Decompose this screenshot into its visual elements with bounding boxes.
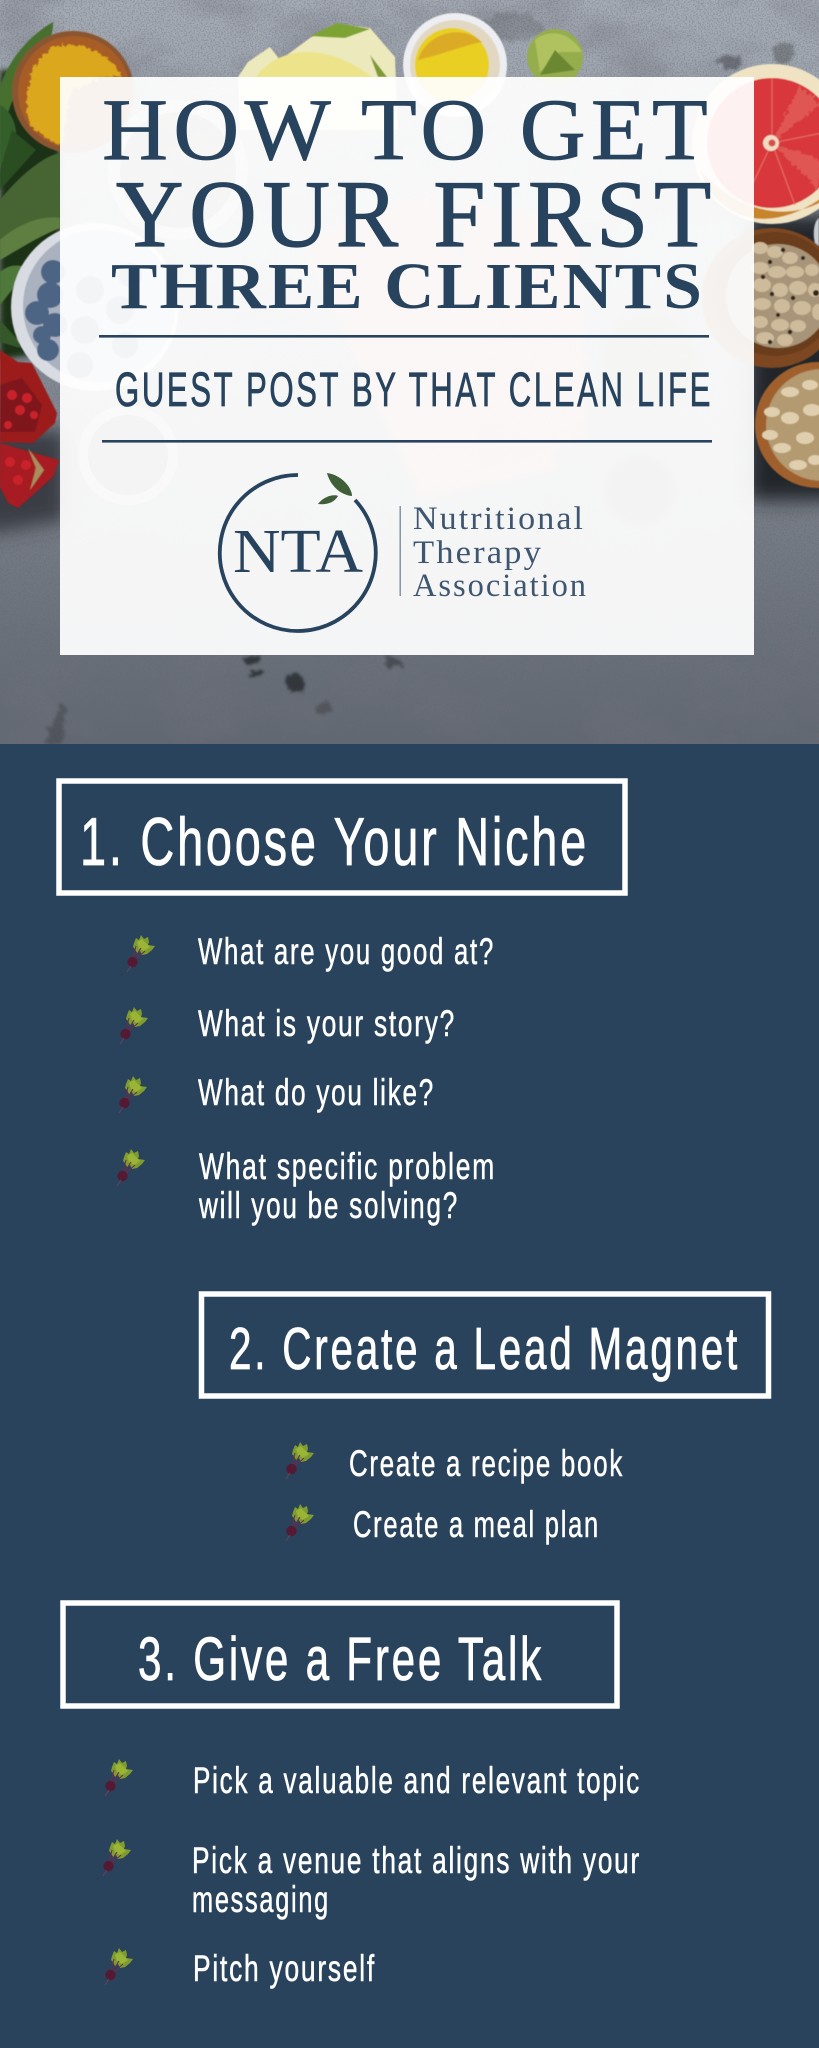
- blueberry bowl: [11, 223, 179, 391]
- grapefruit: [692, 64, 819, 224]
- section 3 item: pitch: [105, 1948, 376, 1989]
- section 3 item: topic: [105, 1759, 641, 1801]
- section 3 item: venue: messaging: [192, 1879, 330, 1920]
- logo wordmark: Association: [413, 568, 588, 604]
- brussels sprout: [527, 29, 583, 85]
- bean bowl: [702, 228, 819, 368]
- section 1 heading: 1. Choose Your Niche: [80, 804, 589, 880]
- cabbage: [238, 23, 398, 130]
- logo monogram: NTA: [233, 518, 363, 586]
- logo wordmark: Nutritional: [413, 501, 585, 537]
- oat bowl: [755, 362, 819, 488]
- turmeric bowl: [12, 31, 134, 153]
- small bowl edge: [814, 218, 819, 250]
- section 2 item: recipe book: Create a recipe book: [349, 1443, 624, 1484]
- olive oil bowl: [403, 13, 507, 117]
- logo wordmark: Therapy: [413, 535, 543, 571]
- navy content panel: [0, 744, 819, 2048]
- section 3 item: venue: Pick a venue that aligns with your: [192, 1840, 641, 1881]
- NTA logo: [220, 473, 588, 631]
- section 3 heading: [63, 1603, 617, 1706]
- section 1 item: problem: will you be solving?: [198, 1185, 459, 1226]
- logo wordmark: [413, 501, 588, 604]
- section 1 item: good at: What are you good at?: [198, 931, 495, 972]
- logo circle: [220, 475, 376, 631]
- section 2 heading: [202, 1294, 768, 1396]
- title panel: [60, 77, 754, 655]
- title: how to get: HOW TO GET: [102, 82, 713, 179]
- section 1 heading: [59, 781, 625, 893]
- section 2 item: meal plan: Create a meal plan: [353, 1504, 600, 1545]
- section 3 item: topic: Pick a valuable and relevant topic: [193, 1760, 641, 1801]
- section 3 item: venue: [103, 1839, 641, 1920]
- section 1 item: problem: [117, 1146, 496, 1226]
- title: three clients: THREE CLIENTS: [111, 250, 704, 323]
- section 2 item: recipe book: [286, 1442, 624, 1484]
- title: your first: YOUR FIRST: [116, 161, 717, 267]
- dark gaps between bowls: [0, 70, 819, 535]
- section 1 item: story: [120, 1003, 456, 1044]
- logo leaves: [318, 473, 352, 504]
- section 1 item: like: [119, 1072, 435, 1113]
- section 1 item: story: What is your story?: [198, 1003, 456, 1044]
- background photo: food on concrete: [0, 0, 819, 745]
- section 2 item: meal plan: [286, 1504, 600, 1545]
- section 1 item: like: What do you like?: [198, 1072, 435, 1113]
- section 1 item: good at: [127, 931, 495, 972]
- spinach leaves: [0, 22, 60, 348]
- dark surface blotches: [44, 13, 794, 745]
- pomegranate: [0, 350, 59, 508]
- section 3 item: pitch: Pitch yourself: [193, 1948, 376, 1989]
- section 1 item: problem: What specific problem: [199, 1146, 496, 1187]
- section 3 heading: 3. Give a Free Talk: [138, 1625, 544, 1693]
- food faintly beneath translucent panel: [78, 100, 700, 525]
